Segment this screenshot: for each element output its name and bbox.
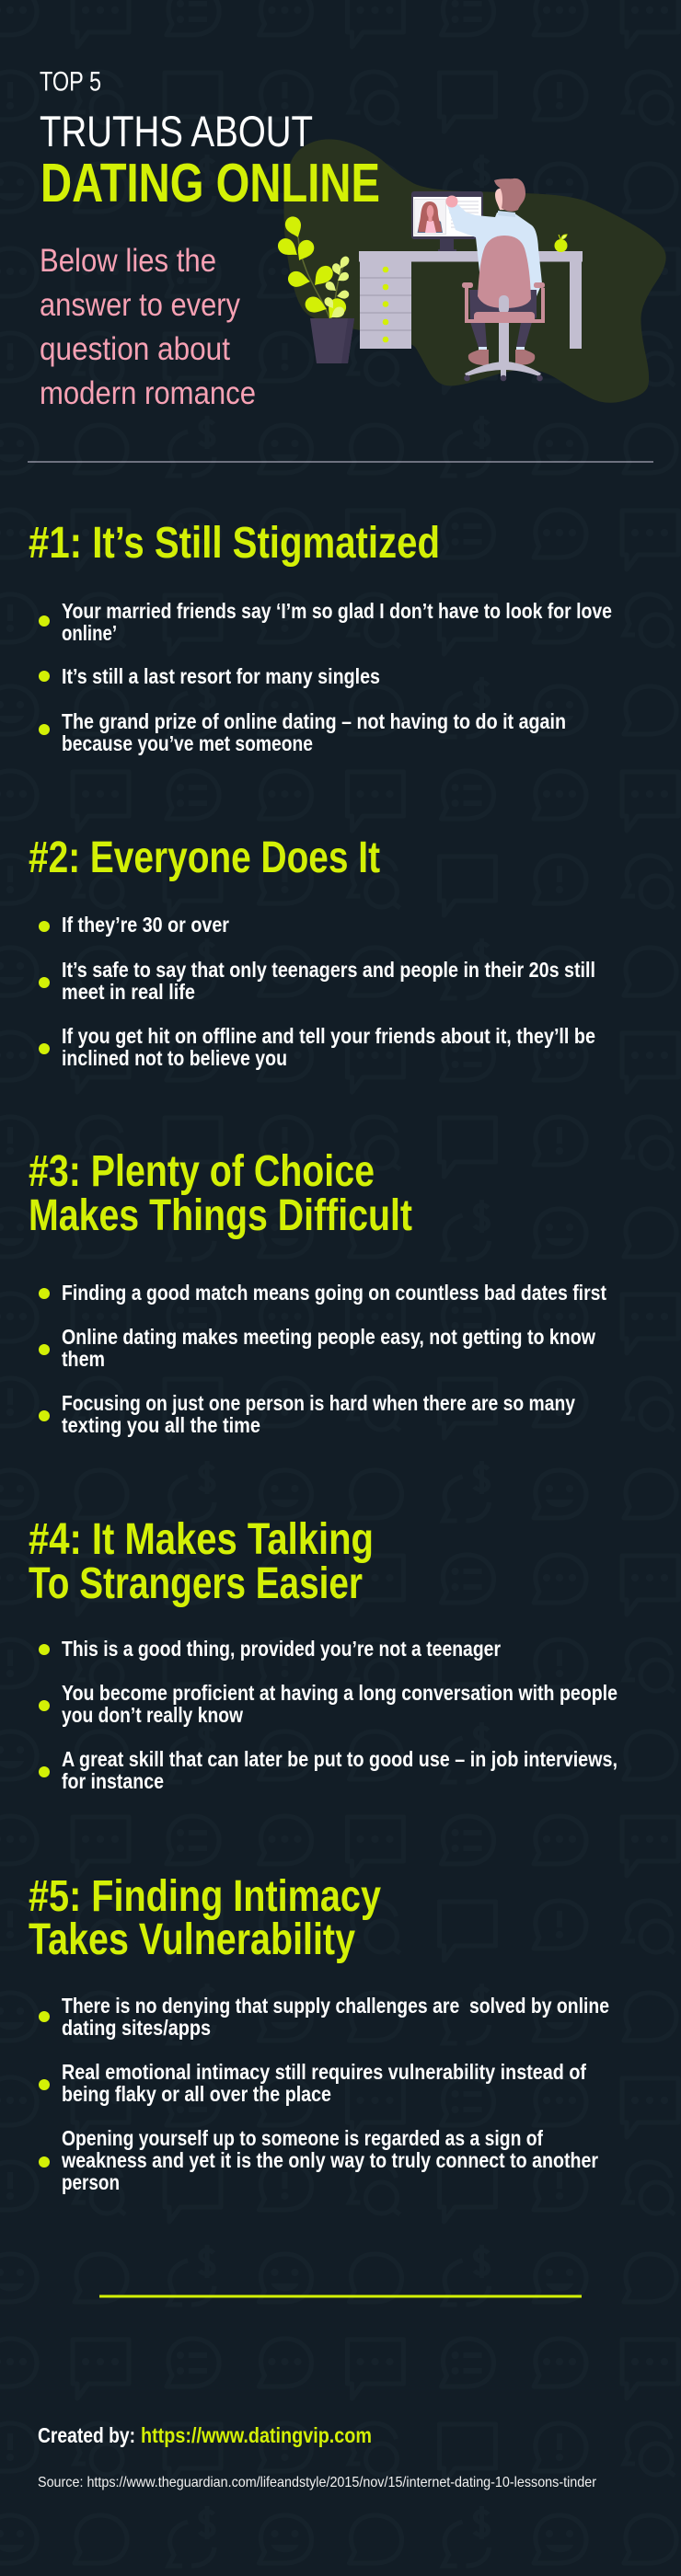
monitor bbox=[411, 191, 483, 251]
hand bbox=[445, 195, 458, 208]
trousers bbox=[469, 290, 537, 348]
intro text: answer to every bbox=[40, 287, 240, 323]
closing rule bbox=[99, 2294, 582, 2298]
header panel bbox=[40, 66, 666, 411]
plant bbox=[274, 214, 351, 323]
divider bbox=[28, 462, 653, 463]
heading 1: #1: It’s Still Stigmatized bbox=[29, 519, 440, 568]
bullets 3: Focusing on just one person is hard when there are so many bbox=[62, 1391, 575, 1415]
man bbox=[445, 178, 545, 381]
heading 3: #3: Plenty of Choice bbox=[29, 1147, 375, 1196]
credit line: Created by: bbox=[38, 2423, 135, 2447]
intro text bbox=[40, 243, 256, 411]
bullets 3: them bbox=[62, 1347, 105, 1371]
drawer knobs bbox=[383, 267, 388, 342]
heading 4: #4: It Makes Talking bbox=[29, 1515, 374, 1564]
bullets 3 bbox=[39, 1281, 606, 1437]
bullets 5: dating sites/apps bbox=[62, 2016, 211, 2040]
bullets 1: The grand prize of online dating – not having to do it again bbox=[62, 709, 566, 733]
chair seat bbox=[474, 312, 535, 323]
eyebrow: top 5: TOP 5 bbox=[40, 66, 101, 98]
socks bbox=[479, 347, 525, 351]
section 1 bbox=[29, 519, 612, 755]
bullets 5: Real emotional intimacy still requires vulnerability instead of bbox=[62, 2060, 586, 2084]
bullets 5: person bbox=[62, 2170, 120, 2194]
title line 2: DATING ONLINE bbox=[40, 153, 380, 213]
credit line: https://www.datingvip.com bbox=[141, 2423, 372, 2447]
bullets 4: you don’t really know bbox=[62, 1703, 244, 1727]
bullets 2: It’s safe to say that only teenagers and people in their 20s still bbox=[62, 958, 595, 982]
hair bbox=[494, 178, 525, 212]
bullets 2: inclined not to believe you bbox=[62, 1046, 287, 1070]
heading 3: Makes Things Difficult bbox=[29, 1191, 412, 1240]
bullets 2: If they’re 30 or over bbox=[62, 913, 229, 937]
collar bbox=[498, 211, 515, 217]
section 2 bbox=[29, 834, 595, 1070]
chair column and base bbox=[465, 295, 541, 377]
shoes bbox=[468, 350, 535, 366]
intro text: modern romance bbox=[40, 375, 256, 411]
plant pot bbox=[310, 318, 354, 363]
bullets 2 bbox=[39, 913, 595, 1070]
woman portrait bbox=[418, 201, 443, 233]
intro text: question about bbox=[40, 331, 230, 367]
heading 3 bbox=[29, 1147, 412, 1240]
bullets 1 bbox=[39, 599, 612, 755]
illustration: man at desk on a video date bbox=[274, 139, 666, 403]
bullets 2: meet in real life bbox=[62, 980, 195, 1004]
chair armrests bbox=[467, 288, 543, 321]
credit line bbox=[38, 2423, 372, 2447]
heading 5: Takes Vulnerability bbox=[29, 1915, 355, 1964]
chair back bbox=[478, 236, 531, 308]
bullets 3: texting you all the time bbox=[62, 1413, 260, 1437]
bullets 5 bbox=[39, 1994, 609, 2194]
bullets 2: If you get hit on offline and tell your friends about it, they’ll be bbox=[62, 1024, 595, 1048]
heading 4 bbox=[29, 1515, 374, 1608]
bullets 1: because you’ve met someone bbox=[62, 731, 313, 755]
section 4 bbox=[29, 1515, 618, 1793]
ear and neck bbox=[495, 189, 508, 210]
title line 1: TRUTHS ABOUT bbox=[40, 107, 313, 155]
blob backdrop bbox=[283, 139, 666, 403]
intro text: Below lies the bbox=[40, 243, 216, 279]
chair wheels bbox=[464, 375, 543, 381]
bullets 1: online’ bbox=[62, 621, 117, 645]
bullets 4 bbox=[39, 1637, 618, 1793]
apple bbox=[554, 235, 567, 252]
bullets 1: It’s still a last resort for many singles bbox=[62, 664, 380, 688]
heading 5 bbox=[29, 1872, 381, 1964]
heading 2: #2: Everyone Does It bbox=[29, 834, 380, 882]
bullets 4: This is a good thing, provided you’re not a teenager bbox=[62, 1637, 501, 1661]
section 5 bbox=[29, 1872, 609, 2194]
bullets 5: being flaky or all over the place bbox=[62, 2082, 331, 2106]
bullets 4: for instance bbox=[62, 1769, 164, 1793]
source line: Source: https://www.theguardian.com/lifeandstyle/2015/nov/15/internet-dating-10-lessons-tinder bbox=[38, 2475, 597, 2490]
heading 4: To Strangers Easier bbox=[29, 1559, 363, 1608]
desk bbox=[359, 251, 583, 349]
heading 5: #5: Finding Intimacy bbox=[29, 1872, 381, 1921]
section 3 bbox=[29, 1147, 606, 1437]
shirt bbox=[447, 204, 542, 296]
bullets 5: Opening yourself up to someone is regarded as a sign of bbox=[62, 2126, 543, 2150]
